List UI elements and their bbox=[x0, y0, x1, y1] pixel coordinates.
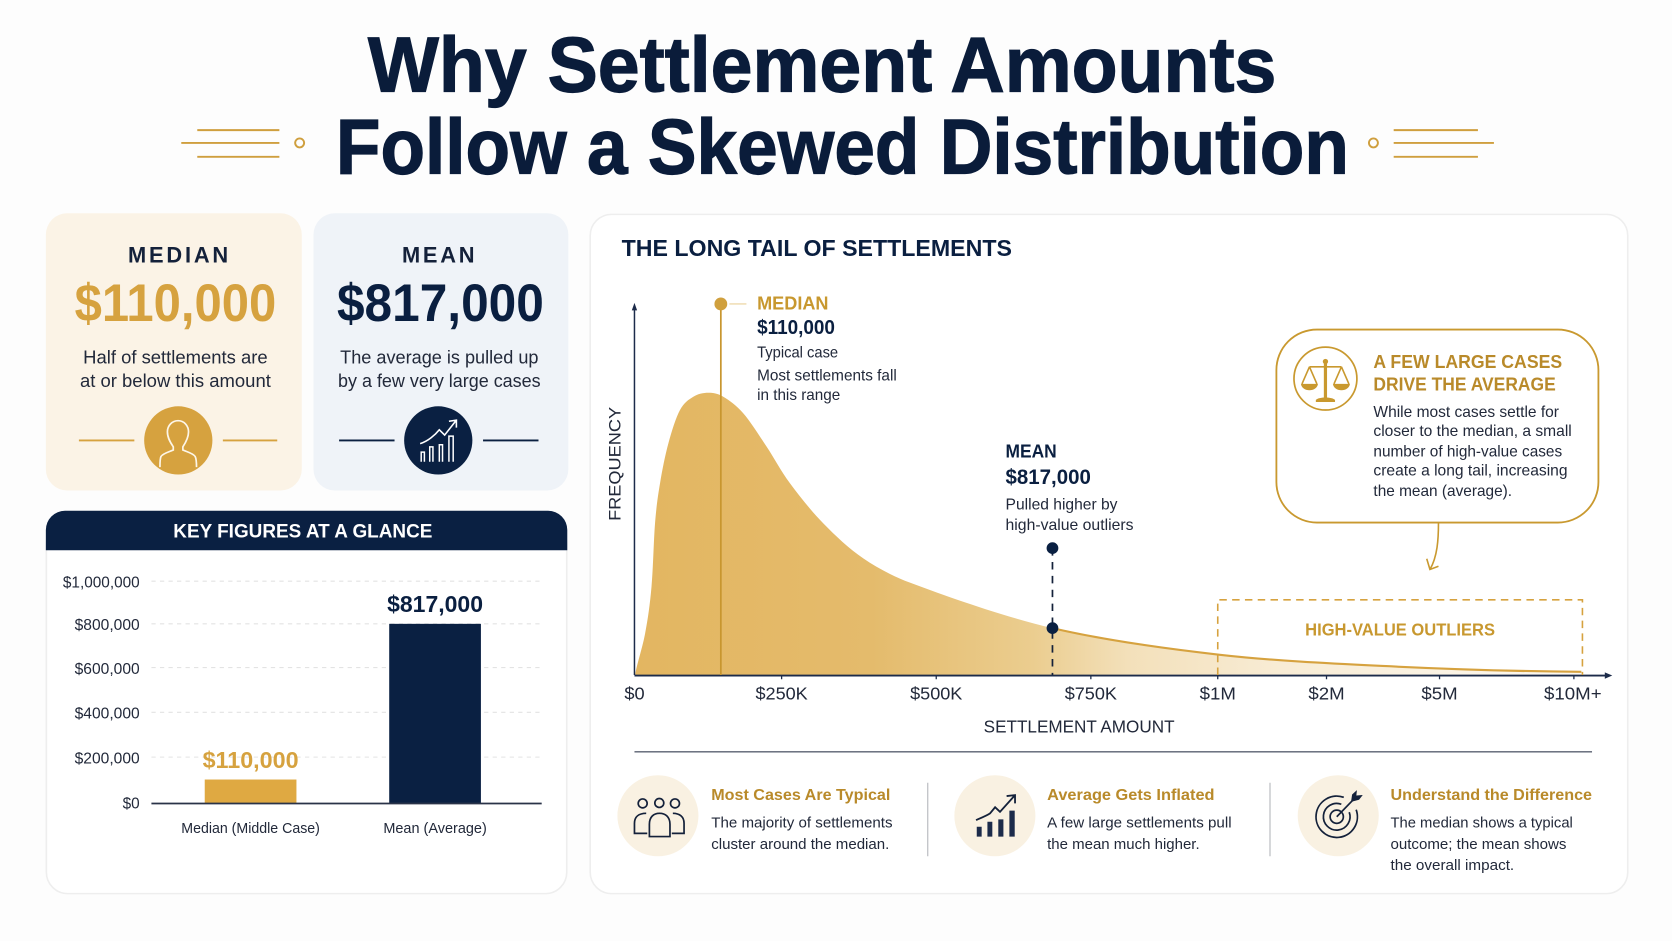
x axis labels: $1M bbox=[1200, 684, 1236, 704]
title ornament: left bbox=[181, 130, 304, 157]
mean annotation: $817,000 bbox=[1006, 465, 1091, 489]
y axis title: FREQUENCY bbox=[606, 407, 625, 521]
insight: understand the difference bbox=[1298, 775, 1592, 874]
x axis labels: $250K bbox=[755, 684, 808, 704]
mean value: $817,000 bbox=[337, 274, 544, 333]
mean bar value: $817,000 bbox=[387, 591, 483, 617]
icon: rising chart bbox=[339, 406, 538, 475]
panel: long tail chart bbox=[590, 214, 1628, 894]
median annotation bbox=[757, 292, 897, 404]
median annotation: in this range bbox=[757, 387, 840, 404]
mean bar bbox=[389, 624, 481, 803]
callout body: number of high-value cases bbox=[1373, 443, 1562, 460]
median value: $110,000 bbox=[75, 274, 276, 333]
title bbox=[336, 23, 1349, 190]
y axis labels: $200,000 bbox=[75, 751, 140, 768]
median marker bbox=[714, 298, 746, 675]
mean annotation: MEAN bbox=[1006, 440, 1057, 461]
y axis labels: $600,000 bbox=[75, 661, 140, 678]
mean marker bbox=[1047, 542, 1058, 675]
insight: understand the difference: outcome; the mean shows bbox=[1390, 836, 1566, 853]
callout heading: DRIVE THE AVERAGE bbox=[1373, 373, 1556, 394]
category labels: Mean (Average) bbox=[383, 820, 487, 837]
bar chart bbox=[63, 575, 542, 837]
icon: person bbox=[79, 406, 277, 475]
arrow: callout to outliers bbox=[1427, 523, 1438, 569]
insight: average gets inflated: A few large settlements pull bbox=[1047, 815, 1232, 832]
callout heading: A FEW LARGE CASES bbox=[1373, 351, 1562, 372]
y axis labels bbox=[63, 575, 140, 812]
mean heading: MEAN bbox=[402, 242, 475, 267]
insight: most cases are typical bbox=[617, 775, 893, 856]
x axis labels: $500K bbox=[910, 684, 963, 704]
median description: at or below this amount bbox=[80, 371, 271, 391]
mean description bbox=[338, 348, 541, 391]
x axis labels: $10M+ bbox=[1544, 684, 1602, 704]
callout bbox=[1276, 330, 1598, 523]
high-value outliers box bbox=[1218, 600, 1582, 675]
x axis labels bbox=[624, 684, 1602, 704]
x axis labels: $750K bbox=[1065, 684, 1117, 704]
x axis labels: $0 bbox=[624, 684, 645, 704]
insight: understand the difference: the overall impact. bbox=[1390, 857, 1514, 874]
axes bbox=[632, 303, 1612, 679]
callout body bbox=[1373, 404, 1572, 500]
insight: understand the difference: Understand the Difference bbox=[1390, 787, 1592, 804]
x axis title: SETTLEMENT AMOUNT bbox=[984, 717, 1175, 737]
median description bbox=[80, 348, 271, 391]
median description: Half of settlements are bbox=[83, 348, 268, 368]
median bar bbox=[205, 780, 296, 803]
title: Why Settlement Amounts bbox=[368, 23, 1276, 109]
mean description: by a few very large cases bbox=[338, 371, 541, 391]
icon: people bbox=[634, 799, 684, 837]
median bar value: $110,000 bbox=[203, 747, 299, 773]
callout body: closer to the median, a small bbox=[1373, 423, 1572, 440]
high-value outliers box: HIGH-VALUE OUTLIERS bbox=[1305, 620, 1495, 640]
title: Follow a Skewed Distribution bbox=[336, 104, 1349, 190]
distribution curve bbox=[635, 393, 1581, 675]
median heading: MEDIAN bbox=[128, 242, 228, 267]
insight: most cases are typical: Most Cases Are Typical bbox=[711, 787, 890, 804]
insight: understand the difference: The median shows a typical bbox=[1390, 815, 1573, 832]
y axis labels: $0 bbox=[123, 795, 140, 812]
key figures header: KEY FIGURES AT A GLANCE bbox=[173, 520, 432, 542]
callout body: While most cases settle for bbox=[1373, 404, 1559, 421]
panel: mean card bbox=[314, 213, 568, 491]
icon: scales of justice bbox=[1294, 347, 1357, 410]
y axis labels: $400,000 bbox=[75, 706, 140, 723]
mean annotation: high-value outliers bbox=[1006, 517, 1134, 534]
insight: average gets inflated bbox=[954, 775, 1232, 856]
x axis labels: $2M bbox=[1308, 684, 1345, 704]
icon: target bbox=[1316, 790, 1363, 837]
key figures header bbox=[46, 511, 567, 550]
icon: chart bbox=[976, 795, 1015, 837]
callout heading bbox=[1373, 351, 1562, 394]
mean annotation bbox=[1006, 440, 1134, 534]
y axis labels: $800,000 bbox=[75, 617, 140, 634]
callout body: create a long tail, increasing bbox=[1373, 463, 1568, 480]
callout body: the mean (average). bbox=[1373, 483, 1512, 500]
mean description: The average is pulled up bbox=[340, 348, 538, 368]
category labels bbox=[181, 820, 487, 837]
median annotation: Most settlements fall bbox=[757, 368, 897, 385]
title ornament: right bbox=[1369, 130, 1494, 157]
panel: median card bbox=[46, 213, 302, 491]
median annotation: $110,000 bbox=[757, 317, 835, 339]
mean annotation: Pulled higher by bbox=[1006, 497, 1118, 514]
median annotation: MEDIAN bbox=[757, 292, 829, 313]
panel: key figures bbox=[46, 511, 567, 894]
median annotation: Typical case bbox=[757, 344, 838, 361]
insight: average gets inflated: Average Gets Inflated bbox=[1047, 787, 1215, 804]
insight: average gets inflated: the mean much higher. bbox=[1047, 836, 1200, 853]
insight: most cases are typical: The majority of settlements bbox=[711, 815, 893, 832]
category labels: Median (Middle Case) bbox=[181, 820, 320, 837]
chart heading: THE LONG TAIL OF SETTLEMENTS bbox=[622, 235, 1012, 261]
insight: most cases are typical: cluster around the median. bbox=[711, 836, 889, 853]
y axis labels: $1,000,000 bbox=[63, 575, 140, 592]
x axis labels: $5M bbox=[1421, 684, 1458, 704]
